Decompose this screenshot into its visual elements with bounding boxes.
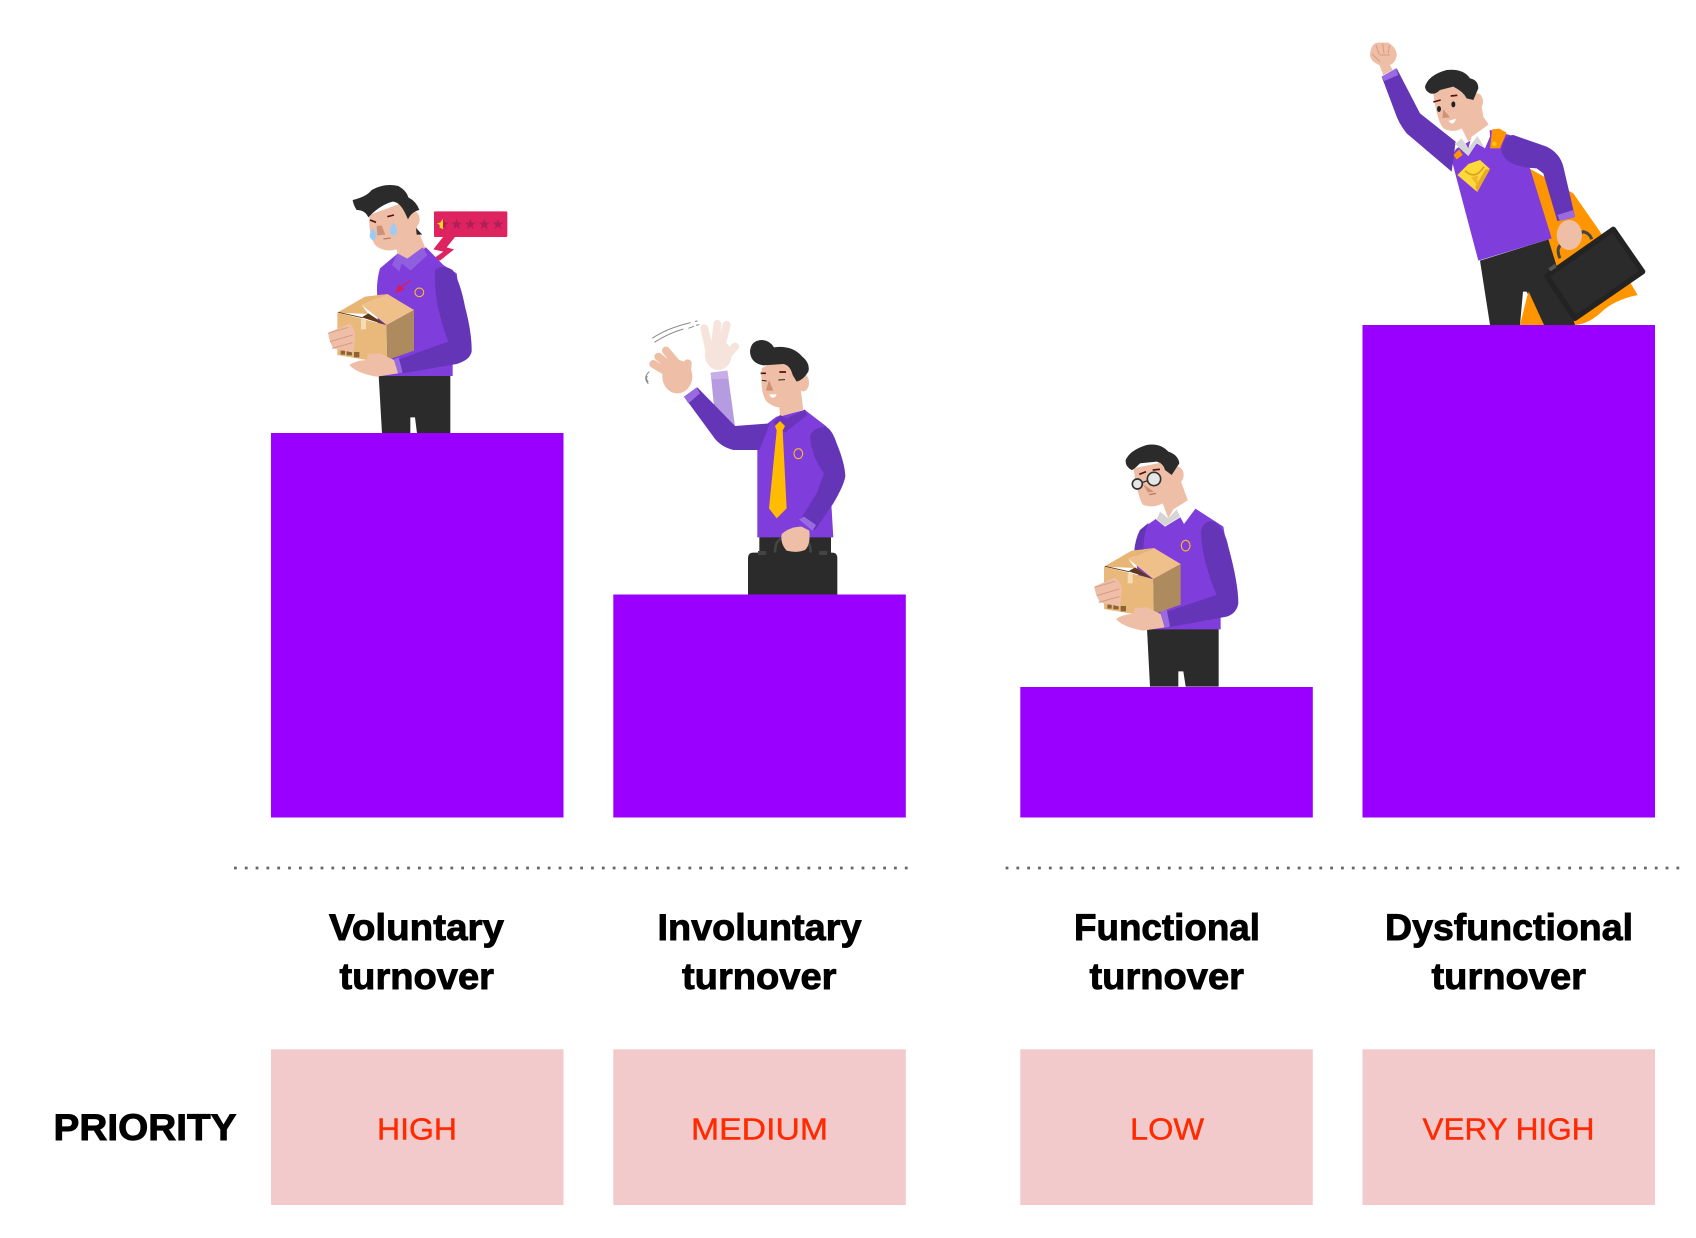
collar (1156, 500, 1196, 527)
collar (773, 409, 807, 433)
collar (1455, 124, 1490, 156)
shirt (1452, 130, 1552, 261)
heading: functional turnover: turnover (1090, 956, 1244, 997)
dotted divider: right group (1006, 867, 1682, 869)
trousers (379, 375, 450, 433)
sleeve (399, 267, 472, 373)
waving hand (653, 351, 692, 393)
bar: functional turnover (1020, 687, 1313, 818)
heading: involuntary turnover: turnover (682, 956, 836, 997)
hair (750, 340, 809, 382)
collar (392, 247, 427, 272)
figure: voluntary turnover, sad man holding a box (328, 185, 507, 433)
left hand (328, 323, 355, 353)
neck and face (1433, 83, 1490, 142)
priority cell: medium (613, 1049, 906, 1205)
heading: voluntary turnover: Voluntary (329, 907, 504, 948)
left hand (1094, 577, 1122, 607)
priority cell: high (271, 1049, 564, 1205)
face details (761, 372, 786, 373)
orange straps (1453, 129, 1507, 159)
cardboard box (337, 294, 414, 360)
cape gap (1521, 292, 1544, 325)
cape (1520, 168, 1638, 325)
heading: dysfunctional turnover: turnover (1432, 956, 1586, 997)
badge (1181, 540, 1190, 551)
raised arm (684, 387, 770, 450)
figure: dysfunctional turnover, superhero man with cape and briefcase (1370, 43, 1643, 325)
heading: dysfunctional turnover: Dysfunctional (1385, 907, 1633, 948)
cardboard box (1104, 548, 1181, 614)
figure: functional turnover, man with glasses holding a box (1094, 445, 1238, 687)
row label: priority: PRIORITY (54, 1107, 237, 1148)
fist (1370, 43, 1397, 75)
priority cell: very high: VERY HIGH (1422, 1112, 1594, 1146)
bar: involuntary turnover (613, 594, 906, 818)
lower hand (349, 353, 398, 377)
dotted divider: left group (234, 867, 908, 869)
hair (353, 185, 422, 235)
sleeve (800, 427, 845, 530)
face details (370, 215, 394, 222)
heading: dysfunctional turnover (1385, 907, 1633, 997)
bar: voluntary turnover (271, 433, 564, 818)
shirt (757, 410, 833, 537)
priority cell: low (1020, 1049, 1313, 1205)
priority cell: medium: MEDIUM (691, 1112, 828, 1146)
heading: involuntary turnover: Involuntary (658, 907, 862, 948)
badge and arrow (415, 288, 424, 297)
trousers (759, 536, 831, 556)
raised arm (1382, 68, 1456, 172)
icon: gem emblem (1457, 160, 1490, 192)
briefcase (1547, 220, 1643, 318)
briefcase (748, 527, 837, 595)
neck and face (369, 200, 425, 263)
bar: dysfunctional turnover (1362, 325, 1655, 818)
sweater (1134, 508, 1237, 629)
heading: functional turnover: Functional (1074, 907, 1260, 948)
neck and face (761, 360, 803, 417)
icon: tears (370, 223, 397, 240)
lower hand (1116, 607, 1165, 631)
sleeve (1162, 521, 1238, 627)
heading: voluntary turnover (329, 907, 504, 997)
face details (1433, 95, 1457, 102)
icon: one star rating speech bubble (433, 211, 507, 261)
priority cell: high: HIGH (377, 1112, 457, 1146)
shirt (377, 247, 467, 376)
figure: involuntary turnover, man waving with a briefcase (646, 321, 845, 595)
hair (1425, 70, 1478, 100)
trousers (1480, 239, 1575, 325)
badge (794, 449, 803, 459)
neck and face (1133, 460, 1188, 518)
trousers (1147, 629, 1219, 687)
sleeve (1501, 135, 1575, 221)
hair (1126, 445, 1179, 475)
icon: motion lines (646, 321, 699, 384)
priority cell: low: LOW (1130, 1112, 1205, 1146)
tie (769, 421, 787, 518)
heading: involuntary turnover (658, 907, 862, 997)
heading: functional turnover (1074, 907, 1260, 997)
icon: glasses (1132, 469, 1161, 495)
ghost arm and hand (704, 324, 735, 433)
heading: voluntary turnover: turnover (340, 956, 494, 997)
priority cell: very high (1362, 1049, 1655, 1205)
